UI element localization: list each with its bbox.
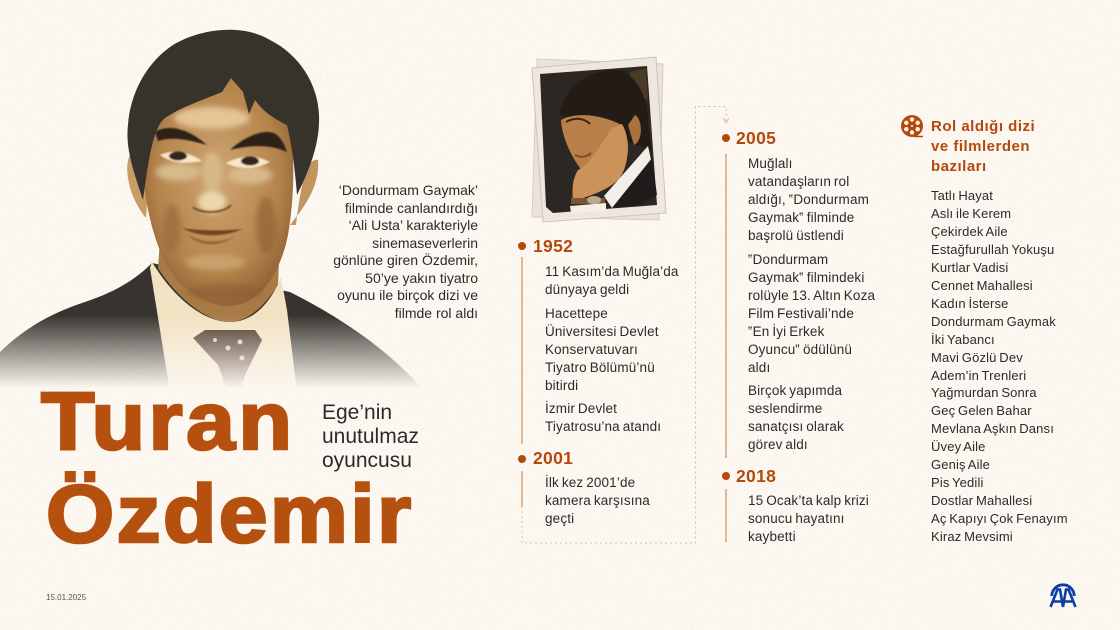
timeline: 2001: kamera karşısına — [545, 493, 650, 508]
films list: Pis Yedili — [931, 475, 984, 490]
films list: Mavi Gözlü Dev — [931, 350, 1023, 365]
timeline: 2018: 2018 — [736, 466, 776, 486]
timeline: 2005: vatandaşların rol — [748, 174, 849, 189]
photo contents — [560, 68, 657, 213]
shirt collar — [150, 262, 297, 392]
films list: Üvey Aile — [931, 439, 986, 454]
portrait of Turan Özdemir — [0, 30, 425, 392]
timeline: 2018: sonucu hayatını — [748, 511, 845, 526]
logo: AA — [1049, 583, 1077, 608]
timeline: 1952: Konservatuvarı — [545, 342, 638, 357]
timeline: 2005: Oyuncu‟ ödülünü — [748, 342, 852, 357]
films list: Kiraz Mevsimi — [931, 529, 1013, 544]
timeline: 2018: kaybetti — [748, 529, 796, 544]
timeline: 1952: Üniversitesi Devlet — [545, 324, 659, 339]
timeline: 2005: 2005 — [736, 128, 776, 148]
films list: Mevlana Aşkın Dansı — [931, 421, 1054, 436]
intro paragraph: filmde rol aldı — [395, 304, 478, 320]
timeline: 2001 — [518, 448, 650, 526]
neck — [158, 248, 279, 322]
timeline: 1952: 11 Kasım’da Muğla’da — [545, 264, 679, 279]
films heading: bazıları — [931, 158, 987, 175]
films list: Cennet Mahallesi — [931, 278, 1033, 293]
timeline: 2005: sanatçısı olarak — [748, 419, 844, 434]
timeline: 2005: Film Festivali’nde — [748, 306, 854, 321]
films list: İki Yabancı — [931, 332, 995, 347]
films heading — [931, 118, 1035, 175]
timeline: 2005: Muğlalı — [748, 156, 793, 171]
films list — [931, 188, 1068, 544]
timeline: 1952: İzmir Devlet — [545, 401, 617, 416]
timeline: 1952: Hacettepe — [545, 306, 608, 321]
intro paragraph: gönlüne giren Özdemir, — [333, 252, 478, 268]
timeline: 2005: ‟Dondurmam — [748, 252, 828, 267]
intro paragraph: oyunu ile birçok dizi ve — [337, 287, 478, 303]
films list: Aslı ile Kerem — [931, 206, 1011, 221]
brows, eyes, mouth — [155, 128, 287, 244]
face — [142, 72, 293, 306]
timeline: 1952: Tiyatrosu’na atandı — [545, 419, 661, 434]
films list: Tatlı Hayat — [931, 188, 993, 203]
timeline: 2005: Birçok yapımda — [748, 383, 842, 398]
timeline: 2005: seslendirme — [748, 401, 822, 416]
films list: Kadın İsterse — [931, 296, 1009, 311]
timeline: 1952: Tiyatro Bölümü’nü — [545, 360, 655, 375]
intro paragraph: ‘Dondurmam Gaymak’ — [339, 182, 478, 198]
date: 15.01.2025 — [46, 593, 86, 602]
films list: Adem’in Trenleri — [931, 368, 1026, 383]
subtitle: oyuncusu — [322, 449, 412, 472]
name line two: Özdemir — [46, 469, 414, 560]
films list: Kurtlar Vadisi — [931, 260, 1008, 275]
films heading: Rol aldığı dizi — [931, 118, 1035, 135]
timeline: 1952: 1952 — [533, 236, 573, 256]
timeline: 1952: dünyaya geldi — [545, 282, 629, 297]
timeline: 1952: bitirdi — [545, 378, 578, 393]
ears — [127, 155, 147, 218]
timeline: 2005: rolüyle 13. Altın Koza — [748, 288, 875, 303]
timeline: 2001: geçti — [545, 511, 574, 526]
intro paragraph: sinemaseverlerin — [372, 234, 478, 250]
films list: Çekirdek Aile — [931, 224, 1008, 239]
films list: Yağmurdan Sonra — [931, 385, 1037, 400]
suit — [0, 263, 425, 392]
name line one: Turan — [41, 376, 295, 467]
timeline: 2005: Gaymak‟ filmindeki — [748, 270, 864, 285]
subtitle: Ege’nin — [322, 401, 392, 424]
timeline: 1952 — [518, 236, 679, 444]
polaroid photo — [532, 57, 666, 222]
main title — [40, 376, 414, 560]
icon: film reel — [901, 115, 923, 138]
films list: Dostlar Mahallesi — [931, 493, 1032, 508]
timeline: 2005: görev aldı — [748, 437, 808, 452]
subtitle — [322, 401, 419, 472]
intro paragraph — [333, 182, 478, 320]
timeline: 2005: aldığı, ‟Dondurmam — [748, 192, 869, 207]
films list: Estağfurullah Yokuşu — [931, 242, 1054, 257]
timeline: 2005 — [722, 128, 875, 458]
intro paragraph: 50’ye yakın tiyatro — [365, 270, 478, 286]
hair — [127, 30, 319, 200]
intro paragraph: ‘Ali Usta’ karakteriyle — [349, 217, 478, 233]
films list: Aç Kapıyı Çok Fenayım — [931, 511, 1068, 526]
timeline: 2005: Gaymak‟ filminde — [748, 210, 854, 225]
timeline: 2005: aldı — [748, 360, 770, 375]
films list: Dondurmam Gaymak — [931, 314, 1056, 329]
subtitle: unutulmaz — [322, 425, 419, 448]
films heading: ve filmlerden — [931, 138, 1030, 155]
timeline: 2001: 2001 — [533, 448, 573, 468]
timeline: 2018 — [722, 466, 869, 544]
timeline: 2001: İlk kez 2001’de — [545, 475, 635, 490]
films list: Geniş Aile — [931, 457, 990, 472]
timeline: 2005: ‟En İyi Erkek — [748, 324, 824, 339]
films list: Geç Gelen Bahar — [931, 403, 1032, 418]
face shading — [156, 107, 276, 300]
tie — [193, 330, 262, 385]
timeline: 2018: 15 Ocak’ta kalp krizi — [748, 493, 869, 508]
timeline: 2005: başrolü üstlendi — [748, 228, 844, 243]
dashed connector frame — [522, 106, 729, 543]
intro paragraph: filminde canlandırdığı — [345, 200, 478, 216]
